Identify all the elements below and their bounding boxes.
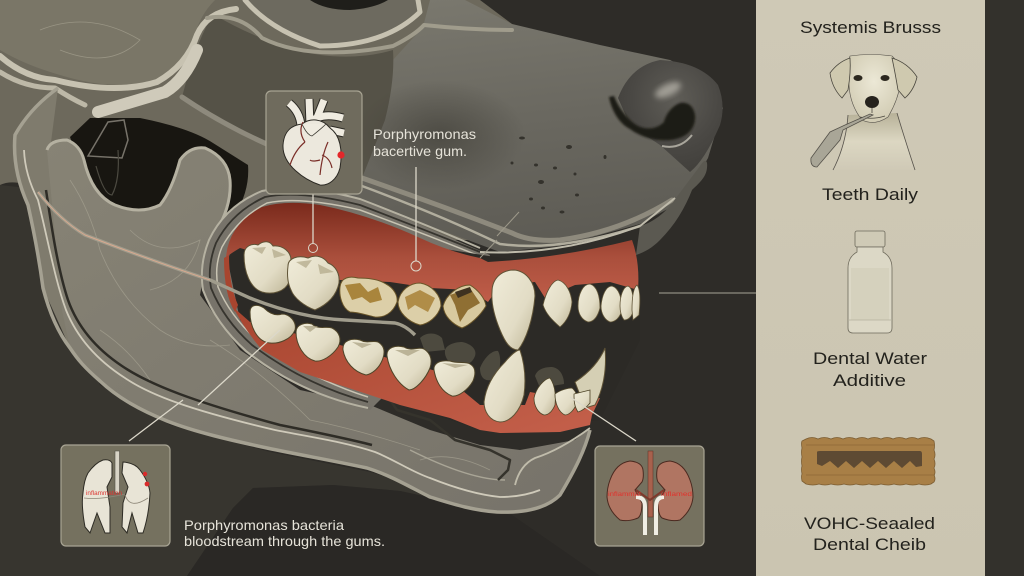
icon: kidneys	[607, 451, 693, 535]
small lower fang	[575, 348, 606, 408]
panel: prevention	[756, 0, 985, 576]
icon: lungs: inflammation	[86, 491, 122, 497]
callout: lungs	[61, 445, 170, 546]
callout text: heart: bacertive gum.	[373, 143, 467, 159]
muzzle pores	[510, 136, 606, 214]
dog head anatomy	[0, 0, 723, 512]
lip edge	[480, 198, 675, 252]
heart box	[266, 91, 362, 194]
callout: heart	[266, 91, 362, 194]
lungs box	[61, 445, 170, 546]
cranium background	[0, 0, 512, 240]
upper gum left lip	[224, 255, 238, 312]
upper incisors	[543, 280, 640, 327]
icon: kidneys: inflamed	[661, 492, 692, 498]
lower gum	[233, 307, 600, 433]
lower incisors	[534, 378, 590, 415]
bone bands	[0, 0, 672, 246]
bone texture	[40, 22, 490, 470]
callout text: bloodstream: bloodstream through the gums.	[184, 533, 385, 549]
icon: kidneys: inflammat	[608, 492, 641, 498]
mandible	[47, 140, 590, 512]
jaw bone crack	[367, 395, 510, 480]
lower canine	[484, 350, 525, 422]
decayed brown teeth	[340, 277, 486, 328]
kidney box	[595, 446, 704, 546]
bloodstream wire	[38, 192, 415, 335]
callout text: bloodstream	[184, 517, 385, 549]
label: dental water additive	[813, 349, 927, 390]
heading: brushing: Systemis Brusss	[800, 18, 941, 37]
callout text: heart	[373, 126, 476, 159]
mandible outline bands	[15, 88, 590, 512]
label: dental chew: Dental Cheib	[813, 535, 926, 554]
upper canine	[492, 270, 535, 350]
right dark margin	[985, 0, 1024, 576]
upper gum	[226, 203, 638, 302]
panel background	[756, 0, 985, 576]
icon: water additive bottle	[848, 231, 892, 333]
callout: kidneys	[595, 446, 704, 546]
eye socket	[245, 0, 418, 45]
icon: dog with toothbrush	[811, 54, 917, 170]
lower molars	[250, 305, 475, 396]
throat cavity	[70, 118, 248, 285]
label: dental chew	[804, 514, 935, 554]
label: teeth daily: Teeth Daily	[822, 185, 919, 204]
mouth interior	[228, 220, 640, 430]
mouth surround rings	[201, 187, 490, 410]
label: dental chew: VOHC-Seaaled	[804, 514, 935, 533]
neck shading	[0, 185, 600, 576]
leader lines	[129, 167, 756, 441]
lower lip	[636, 161, 707, 255]
muzzle	[270, 0, 723, 252]
nose	[609, 60, 723, 172]
icon: heart	[283, 99, 345, 185]
callout text: heart: Porphyromonas	[373, 126, 476, 142]
nostril	[609, 96, 695, 140]
background teeth in shadow	[420, 334, 564, 388]
upper molars	[244, 242, 339, 310]
label: dental water additive: Dental Water	[813, 349, 927, 368]
icon: dental chew	[802, 438, 935, 485]
left outer band fill	[15, 88, 100, 348]
label: dental water additive: Additive	[833, 371, 906, 390]
sinus dark lobe	[182, 14, 393, 178]
shadow behind callout text	[355, 80, 525, 190]
callout text: bloodstream: Porphyromonas bacteria	[184, 517, 344, 533]
upper left cranial lobe	[0, 0, 215, 85]
